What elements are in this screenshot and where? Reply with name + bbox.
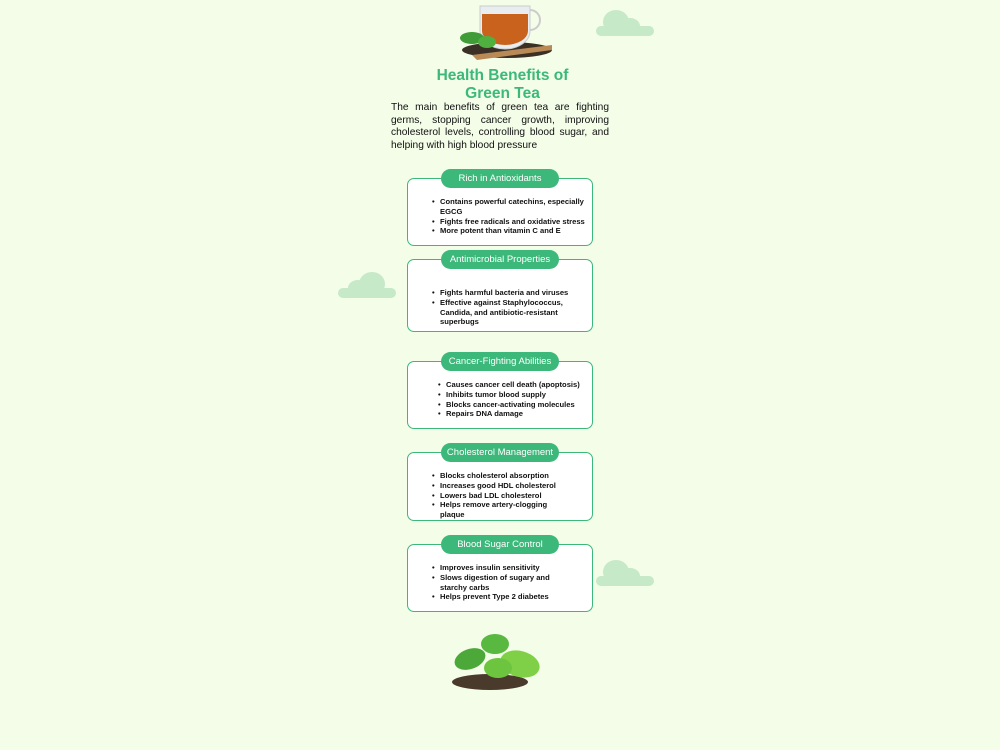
cloud top right <box>596 10 654 36</box>
panel: cancer: Causes cancer cell death (apoptosis) <box>446 380 580 389</box>
panel: antioxidants: Rich in Antioxidants <box>459 173 541 184</box>
panel: blood sugar: Improves insulin sensitivity <box>440 563 540 572</box>
intro text: The main benefits of green tea are fighting germs, stopping cancer growth, improving cholesterol levels, controlling blood sugar, and helping with high blood pressure <box>391 102 609 151</box>
icon: tea cup <box>460 6 552 60</box>
panel: cancer: Blocks cancer-activating molecules <box>446 400 575 409</box>
panel: cancer: Inhibits tumor blood supply <box>446 390 546 399</box>
panel: antioxidants: More potent than vitamin C and E <box>440 226 561 235</box>
cloud bottom right <box>596 560 654 586</box>
panel: antimicrobial: Antimicrobial Properties <box>450 254 550 265</box>
panel: cancer: Cancer-Fighting Abilities <box>449 356 551 367</box>
panel: antioxidants: Fights free radicals and oxidative stress <box>440 217 585 226</box>
panel: cholesterol: Increases good HDL cholesterol <box>440 481 556 490</box>
cloud left <box>338 272 396 298</box>
panel: cholesterol <box>407 452 593 521</box>
panel: antimicrobial: Effective against Staphylococcus, Candida, and antibiotic-resistant superbugs <box>440 298 563 326</box>
panel: antioxidants: Contains powerful catechins, especially EGCG <box>440 197 584 216</box>
title: Health Benefits of <box>437 67 568 84</box>
panel: antioxidants <box>407 178 593 246</box>
panel: cholesterol: Helps remove artery-clogging plaque <box>440 500 547 519</box>
panel: cholesterol: Cholesterol Management <box>447 447 553 458</box>
icon: tea leaves <box>452 634 540 690</box>
panel: cancer: Repairs DNA damage <box>446 409 523 418</box>
panel: cancer <box>407 361 593 429</box>
panel: blood sugar: Blood Sugar Control <box>457 539 543 550</box>
panel: antimicrobial <box>407 259 593 332</box>
panel: antimicrobial: Fights harmful bacteria and viruses <box>440 288 568 297</box>
panel: blood sugar: Helps prevent Type 2 diabetes <box>440 592 549 601</box>
panel: blood sugar <box>407 544 593 612</box>
panel: blood sugar: Slows digestion of sugary and starchy carbs <box>440 573 550 592</box>
title <box>437 67 568 102</box>
panel: cholesterol: Blocks cholesterol absorption <box>440 471 549 480</box>
title: Green Tea <box>465 85 540 102</box>
panel: cholesterol: Lowers bad LDL cholesterol <box>440 491 542 500</box>
